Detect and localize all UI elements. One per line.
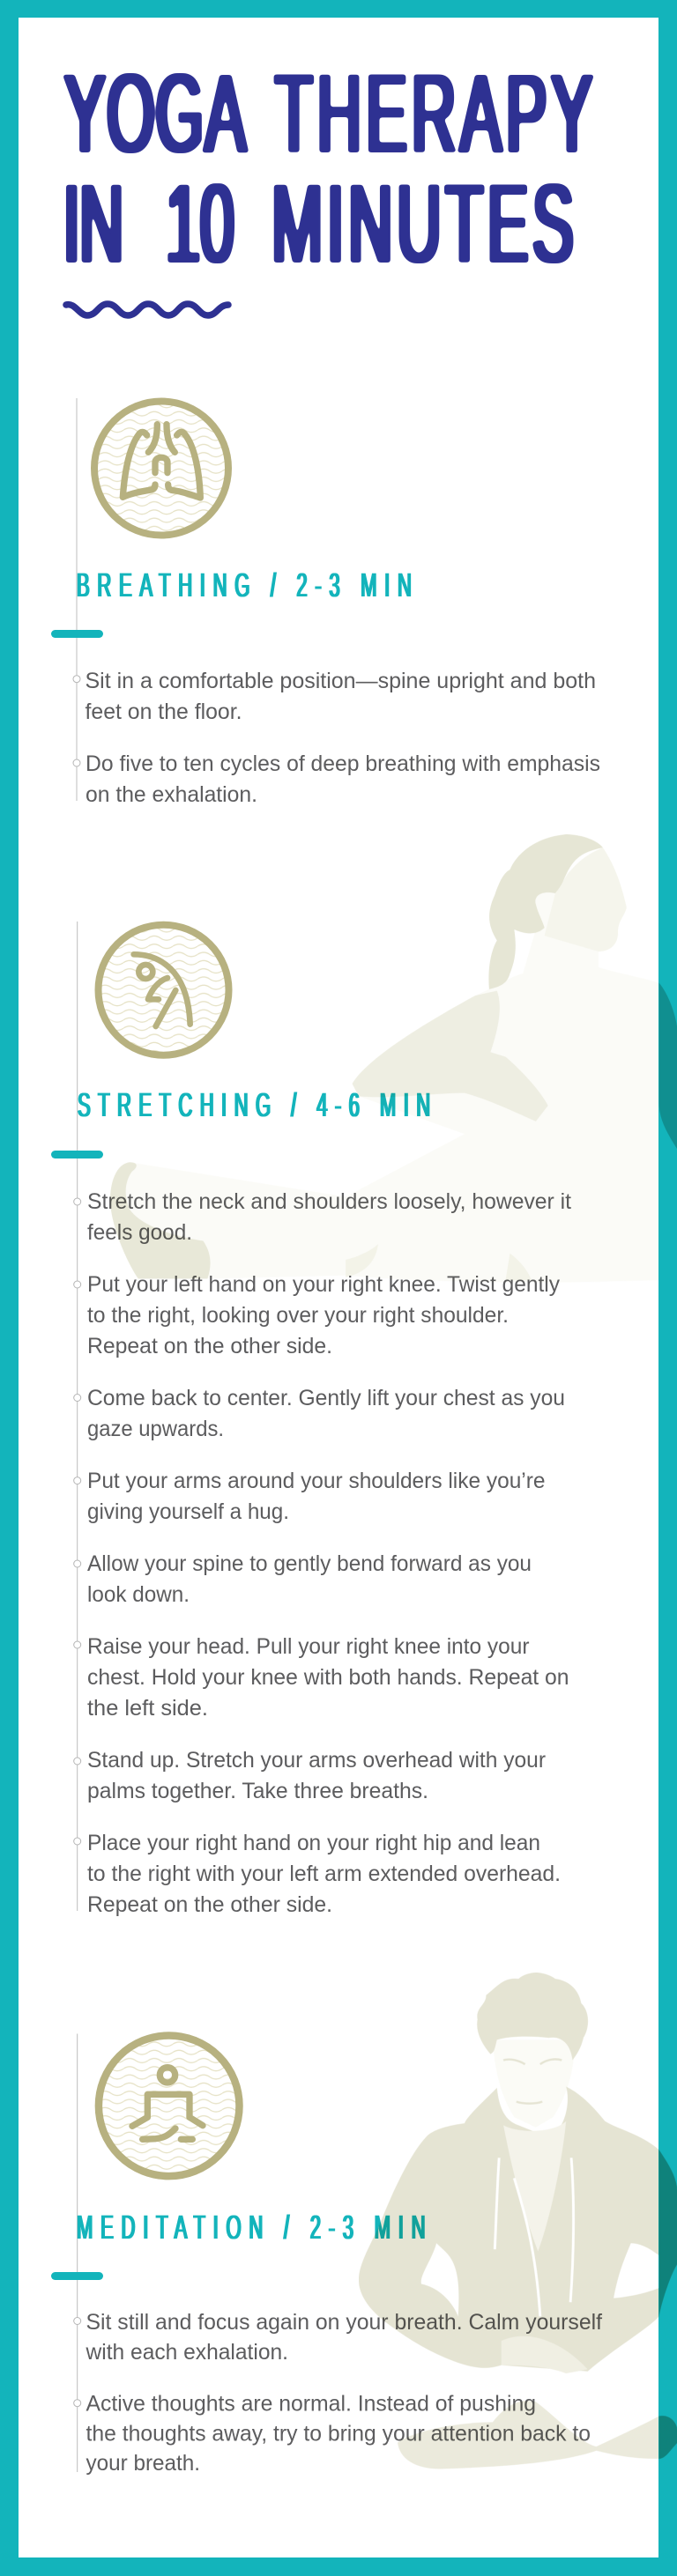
step [74,1469,545,1524]
step: gaze upwards. [87,1417,224,1441]
step [74,1831,561,1917]
title [63,53,592,285]
step: to the right, looking over your right shoulder. [87,1303,509,1328]
step [74,2310,602,2365]
title: 10 [166,163,234,285]
panel: breathing [51,398,600,807]
step: to the right with your left arm extended overhead. [87,1862,561,1886]
heading: meditation: MEDITATION / 2-3 MIN [77,2209,426,2247]
step: Do five to ten cycles of deep breathing with emphasis [86,751,600,776]
photo: man meditating [359,1973,677,2469]
step [74,1748,546,1803]
heading: breathing: BREATHING / 2-3 MIN [77,566,412,604]
panel: stretching [51,922,571,1917]
accent bar [51,2272,103,2280]
title: THERAPY [275,53,592,175]
step [74,1634,569,1721]
step: the left side. [87,1696,208,1721]
step: the thoughts away, try to bring your attention back to [86,2421,591,2446]
accent bar [51,630,103,638]
title: MINUTES [272,163,574,285]
step: Active thoughts are normal. Instead of pushing [86,2391,536,2416]
step: palms together. Take three breaths. [87,1779,428,1803]
step [73,669,596,724]
step [74,1386,565,1441]
step: Place your right hand on your right hip and lean [87,1831,540,1855]
heading: stretching: STRETCHING / 4-6 MIN [78,1086,430,1124]
step: Allow your spine to gently bend forward as you [87,1551,532,1576]
step [74,2391,591,2476]
wavy title underline [66,304,228,315]
step: look down. [87,1582,190,1607]
step: chest. Hold your knee with both hands. Repeat on [87,1665,569,1690]
step: Repeat on the other side. [87,1892,332,1917]
step: Sit in a comfortable position—spine upright and both [85,669,596,693]
icon: stretching figure [99,925,229,1055]
step: your breath. [86,2451,200,2476]
title: IN [63,163,123,285]
step: feels good. [87,1220,192,1245]
step: Raise your head. Pull your right knee into your [87,1634,529,1659]
step: Put your arms around your shoulders like you’re [87,1469,545,1493]
step: Repeat on the other side. [87,1334,332,1358]
accent bar [51,1151,103,1158]
panel: meditation [51,2033,602,2476]
step [74,1272,560,1358]
step [73,751,600,807]
step: Stretch the neck and shoulders loosely, however it [87,1189,571,1214]
title: YOGA [64,53,246,175]
step: Sit still and focus again on your breath. Calm yourself [86,2310,602,2335]
step: Come back to center. Gently lift your chest as you [87,1386,565,1410]
step: on the exhalation. [86,782,257,807]
step [74,1189,571,1245]
icon: lungs [94,402,228,536]
step: giving yourself a hug. [87,1499,289,1524]
photo: woman in seated twist [110,834,677,1283]
step: Put your left hand on your right knee. Twist gently [87,1272,560,1297]
icon: meditating figure [99,2035,240,2176]
step: feet on the floor. [85,700,242,724]
step: with each exhalation. [86,2340,288,2365]
step [74,1551,532,1607]
step: Stand up. Stretch your arms overhead with your [87,1748,546,1773]
